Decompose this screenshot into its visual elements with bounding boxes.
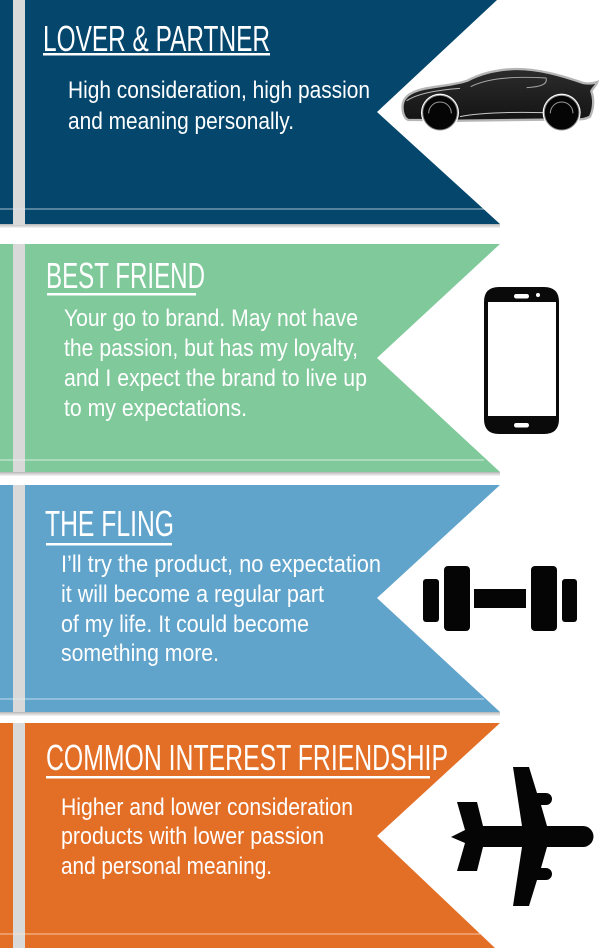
text: the fling description: it will become a regular part bbox=[61, 581, 324, 608]
text: lover and partner description bbox=[68, 77, 370, 135]
text: best friend description: and I expect the brand to live up bbox=[64, 365, 367, 392]
icon: sports car bbox=[403, 69, 597, 132]
panel: the fling bbox=[0, 485, 500, 716]
panel: lover and partner bbox=[0, 0, 500, 228]
panel: common interest friendship bbox=[0, 723, 500, 948]
text: best friend description: the passion, but has my loyalty, bbox=[64, 335, 358, 362]
panel: best friend bbox=[0, 244, 500, 476]
icon: smartphone bbox=[484, 287, 559, 434]
text: common interest friendship description: Higher and lower consideration bbox=[61, 794, 353, 821]
heading: the fling bbox=[45, 503, 174, 546]
text: common interest friendship description: products with lower passion bbox=[61, 823, 324, 850]
text: lover and partner description: and meaning personally. bbox=[68, 108, 294, 135]
text: the fling description: I’ll try the product, no expectation bbox=[61, 551, 381, 578]
text: the fling description: something more. bbox=[61, 640, 219, 667]
text: best friend description: to my expectations. bbox=[64, 395, 247, 422]
text: lover and partner description: High consideration, high passion bbox=[68, 77, 370, 104]
text: the fling description: of my life. It could become bbox=[61, 611, 309, 638]
text: common interest friendship description: and personal meaning. bbox=[61, 853, 272, 880]
text: the fling description bbox=[61, 551, 381, 667]
text: best friend description: Your go to brand. May not have bbox=[64, 305, 358, 332]
heading: best friend: BEST FRIEND bbox=[46, 255, 205, 296]
heading: lover and partner: LOVER & PARTNER bbox=[43, 18, 270, 59]
icon: dumbbell bbox=[423, 566, 577, 631]
text: best friend description bbox=[64, 305, 367, 422]
text: common interest friendship description bbox=[61, 794, 353, 880]
heading: the fling: THE FLING bbox=[45, 503, 174, 544]
icon: airplane bbox=[451, 767, 594, 906]
